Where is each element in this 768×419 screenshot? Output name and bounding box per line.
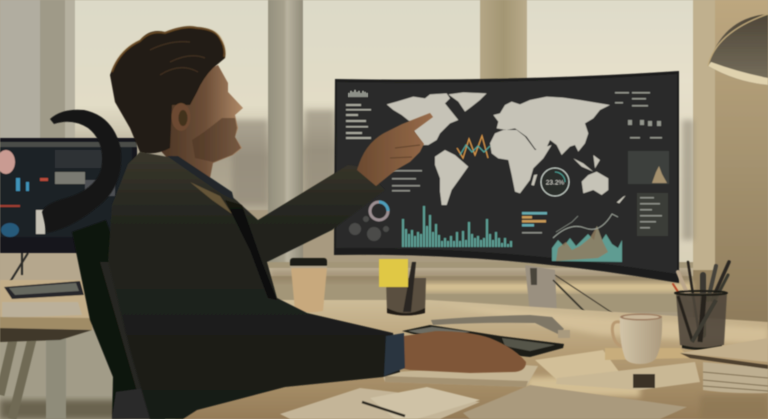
beard xyxy=(192,118,241,162)
lapel highlight xyxy=(190,182,232,214)
South America xyxy=(435,150,468,205)
sticky note and pencil cup xyxy=(379,259,426,316)
left pen cup xyxy=(386,278,426,316)
chair base xyxy=(112,386,165,419)
left secondary monitor xyxy=(0,138,137,282)
pen holder xyxy=(673,262,729,350)
percentage ring xyxy=(541,168,569,196)
resting hand xyxy=(398,331,526,373)
chair headrest xyxy=(42,110,121,233)
left desk and keyboard xyxy=(0,280,94,419)
mini progress bars xyxy=(522,212,547,234)
Greenland xyxy=(448,92,487,112)
window left xyxy=(75,0,268,210)
teal bar chart xyxy=(403,206,511,247)
neck and face xyxy=(160,65,243,194)
lapel dark seam xyxy=(225,200,277,300)
monitor screen xyxy=(336,74,677,274)
area chart xyxy=(552,214,622,262)
keyboard and mouse pad xyxy=(382,325,564,387)
book stack xyxy=(680,338,768,393)
line chart over ocean xyxy=(457,136,490,158)
stand base xyxy=(431,315,570,338)
window right xyxy=(527,0,693,270)
office chair xyxy=(42,110,165,419)
window middle xyxy=(303,0,480,200)
desk lamp xyxy=(708,14,768,85)
chair back xyxy=(72,220,165,419)
pointing hand xyxy=(357,113,433,186)
background building haze xyxy=(232,110,694,240)
travel mug xyxy=(290,258,327,312)
Africa xyxy=(490,130,552,193)
New Zealand xyxy=(617,196,626,203)
top-left mini histogram xyxy=(349,90,367,97)
desk legs xyxy=(0,335,33,419)
main curved monitor xyxy=(334,71,679,283)
cup xyxy=(612,314,662,364)
Madagascar xyxy=(531,174,537,186)
right wall xyxy=(693,0,768,330)
torso and jacket xyxy=(108,152,400,419)
world map xyxy=(387,92,626,205)
Australia xyxy=(582,172,608,195)
gauge cluster xyxy=(349,202,389,241)
window sill shadow under monitor xyxy=(270,270,690,282)
shirt collar xyxy=(167,156,234,200)
ear xyxy=(172,103,190,131)
cuff xyxy=(384,333,405,376)
desk surface xyxy=(175,300,768,419)
man xyxy=(108,26,526,419)
right panels xyxy=(615,92,669,236)
Southeast Asia islands xyxy=(573,155,600,172)
North America xyxy=(387,93,458,145)
papers on desk xyxy=(280,348,700,419)
hair xyxy=(110,26,225,153)
left list bars xyxy=(346,104,371,139)
window sill xyxy=(268,262,693,312)
left mid small panels xyxy=(392,170,422,192)
percentage ring: 23.2% xyxy=(546,180,564,186)
Eurasia xyxy=(493,97,610,155)
monitor bezel xyxy=(334,71,679,283)
monitor stand xyxy=(525,265,620,318)
